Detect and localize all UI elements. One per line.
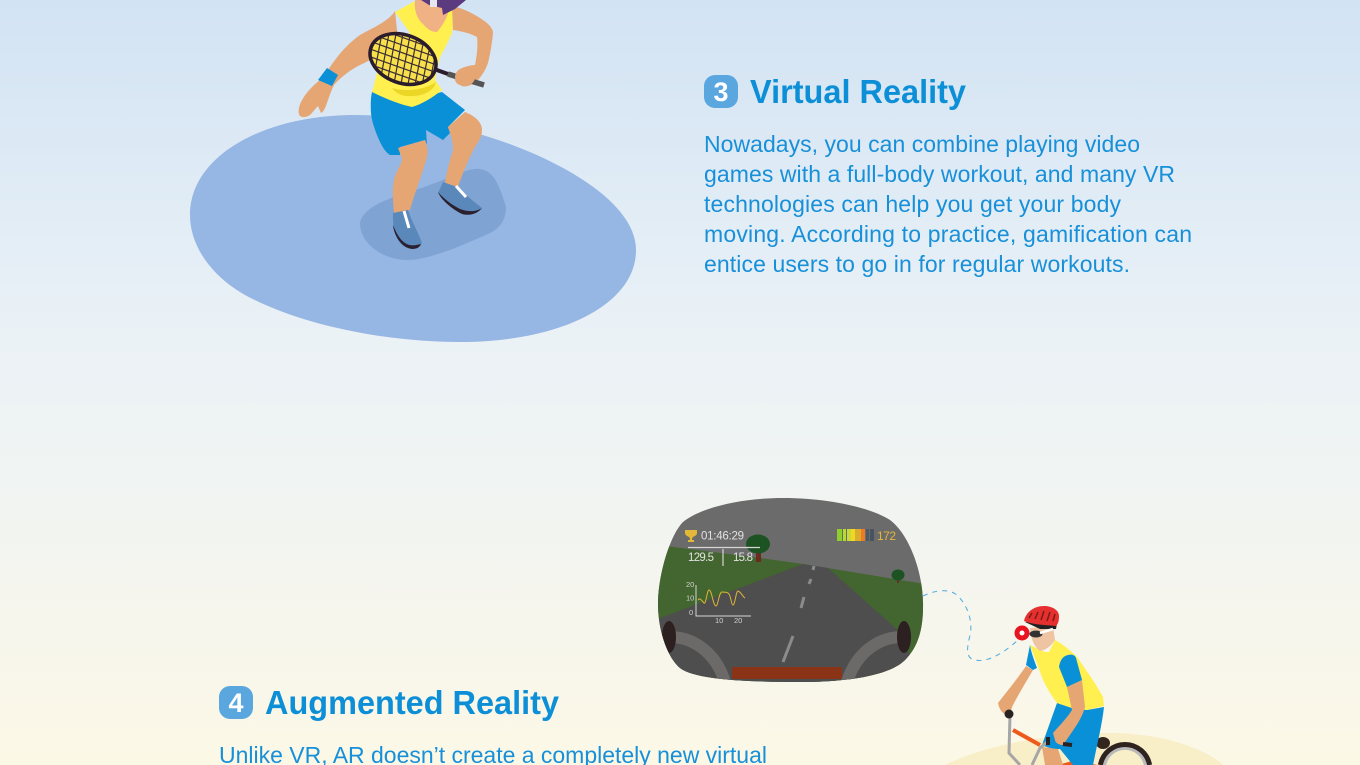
mini chart: 10 <box>686 594 694 602</box>
right shoe stripe <box>456 186 466 197</box>
left grip <box>662 621 676 653</box>
left shoe <box>393 210 422 248</box>
timer: 01:46:29 <box>701 530 744 542</box>
helmet shadow <box>1025 618 1058 629</box>
dashed connector <box>923 591 1018 660</box>
right grip <box>897 621 911 653</box>
mini chart: 10 <box>715 616 723 625</box>
section 3 body text: games with a full-body workout, and many VR <box>704 161 1175 187</box>
sky <box>658 498 924 682</box>
neck and face <box>1030 626 1055 651</box>
floor blob <box>945 733 1223 765</box>
sunglasses <box>1030 630 1042 638</box>
brake pad <box>732 667 842 679</box>
illustration: VR tennis player <box>190 0 636 342</box>
rear wheel <box>1100 744 1150 765</box>
right arm <box>452 6 493 86</box>
racket strings <box>364 26 442 92</box>
badge 3 <box>704 75 738 108</box>
racket grip <box>448 74 484 85</box>
neck and face <box>415 0 450 32</box>
right shoe sole <box>438 192 482 215</box>
racket string grid <box>372 35 434 83</box>
VR headset <box>421 0 466 15</box>
meter value: 172 <box>877 529 896 543</box>
road <box>658 564 910 682</box>
helmet vents <box>1029 611 1055 621</box>
tank top <box>372 0 455 107</box>
badge 3: 3 <box>713 77 729 107</box>
floor blob <box>190 115 636 342</box>
grass <box>658 546 924 682</box>
right handlebar <box>847 637 904 682</box>
section 4 heading <box>219 684 560 721</box>
near arm <box>1053 680 1085 745</box>
badge 4 <box>219 686 253 719</box>
heading text: Augmented Reality <box>265 684 560 721</box>
right grip <box>1048 737 1072 745</box>
display scene <box>658 498 924 682</box>
top tube <box>1013 730 1040 745</box>
right leg <box>445 112 482 187</box>
large tree <box>746 534 770 562</box>
illustration: AR cyclist <box>945 606 1223 765</box>
saddle <box>1096 737 1110 749</box>
heart rate meter <box>837 529 874 541</box>
mini chart: 20 <box>734 616 742 625</box>
heading text: Virtual Reality <box>750 73 967 110</box>
wristband <box>318 68 338 86</box>
road dashes <box>783 566 814 662</box>
left shoe sole <box>393 225 421 249</box>
stats divider <box>688 548 760 566</box>
far sleeve <box>1026 645 1037 670</box>
left shoe stripe <box>404 211 409 228</box>
section 3 body text: entice users to go in for regular workouts. <box>704 251 1130 277</box>
far arm <box>998 666 1033 715</box>
mini chart: 20 <box>686 580 694 589</box>
section 3 body text <box>704 131 1192 277</box>
bike helmet <box>1024 606 1059 626</box>
near sleeve <box>1059 655 1082 687</box>
jersey <box>1030 640 1104 710</box>
trophy icon <box>685 530 697 542</box>
VR headset strap <box>430 0 437 7</box>
speed stat: 15.8 <box>733 552 753 564</box>
mini chart: 0 <box>689 608 693 617</box>
left handlebar <box>668 637 725 682</box>
shorts <box>1042 703 1104 765</box>
racket frame <box>363 25 443 93</box>
small tree <box>892 570 904 583</box>
section 3 body text: Nowadays, you can combine playing video <box>704 131 1140 157</box>
shirt fold <box>392 82 436 96</box>
player shadow <box>360 169 506 260</box>
left arm <box>299 11 398 117</box>
red marker <box>1014 626 1030 640</box>
section 3 heading <box>704 73 967 110</box>
AR display view <box>658 498 924 682</box>
tennis racket <box>368 32 485 88</box>
distance stat: 129.5 <box>688 552 714 564</box>
handlebars <box>1009 715 1047 765</box>
section 3 body text: technologies can help you get your body <box>704 191 1122 217</box>
frame bottom <box>1058 761 1098 765</box>
section 3 body text: moving. According to practice, gamification can <box>704 221 1192 247</box>
badge 4: 4 <box>228 688 244 718</box>
thigh <box>1042 747 1063 765</box>
left grip <box>1004 710 1014 718</box>
sunglasses strap <box>1040 629 1053 633</box>
racket handle <box>434 69 448 74</box>
shorts <box>371 92 465 155</box>
right shoe <box>438 182 482 214</box>
mini chart <box>686 580 751 625</box>
left leg <box>393 140 428 213</box>
gripping hand <box>455 68 475 86</box>
